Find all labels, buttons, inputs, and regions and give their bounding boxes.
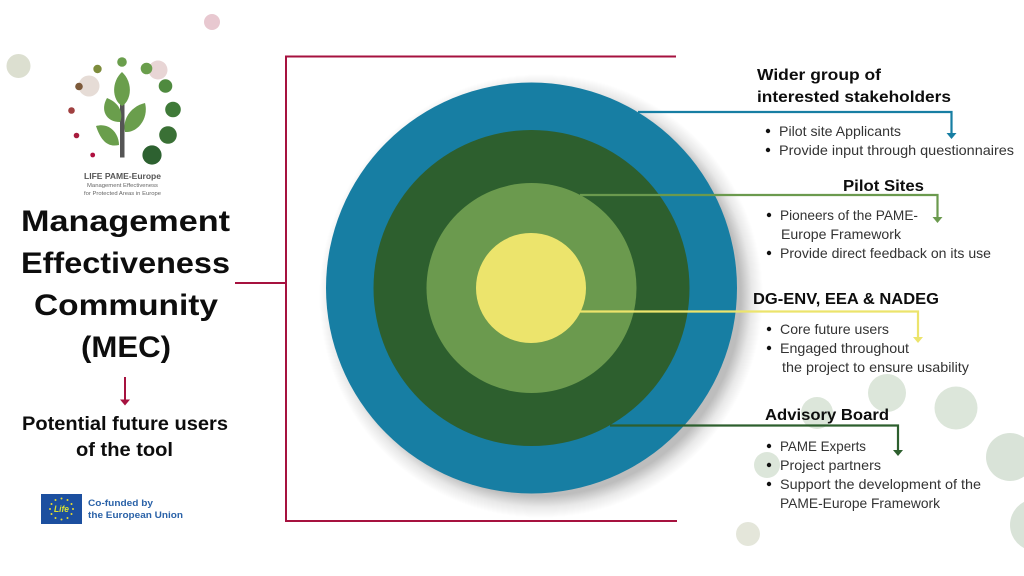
circle: DG-ENV, EEA & NADEG — [476, 233, 586, 343]
bullets: the project to ensure usability — [782, 359, 969, 375]
connector: pilot sites — [580, 195, 942, 223]
title: Management Effectiveness Community (MEC): Community — [34, 289, 219, 322]
arrow: title to subtitle — [120, 377, 130, 406]
heading: Wider group of — [757, 67, 882, 84]
concentric circle diagram — [319, 74, 763, 518]
bullets — [767, 438, 981, 511]
bullets: Support the development of the — [780, 476, 981, 492]
circle: wider group of stakeholders — [326, 82, 737, 494]
bullets: Pioneers of the PAME- — [780, 207, 918, 223]
heading: DG-ENV, EEA & NADEG — [753, 291, 939, 308]
circle: pilot sites — [426, 183, 636, 393]
connector: wider group — [638, 112, 956, 139]
bullets — [767, 207, 991, 261]
bullets: Core future users — [780, 321, 889, 337]
co-funded text: Co-funded by — [88, 498, 154, 509]
text block: DG-ENV, EEA & NADEG — [753, 291, 969, 375]
text block: pilot sites — [767, 178, 991, 261]
title: Management Effectiveness Community (MEC): Effectiveness — [21, 247, 230, 280]
logo dots — [68, 57, 181, 165]
connector: DG-ENV — [580, 312, 923, 343]
connector: advisory board — [610, 426, 903, 456]
heading: interested stakeholders — [757, 89, 951, 106]
subtitle: Potential future users of the tool: Potential future users — [22, 414, 228, 435]
bullets: Provide direct feedback on its use — [780, 245, 991, 261]
logo text — [84, 172, 162, 197]
bullets: PAME Experts — [780, 438, 866, 454]
logo text: Management Effectiveness — [87, 183, 158, 189]
text block: wider group of interested stakeholders — [757, 67, 1014, 158]
bracket — [235, 56, 677, 521]
bullets: Europe Framework — [781, 226, 902, 242]
heading: Advisory Board — [765, 407, 889, 424]
bullets: Pilot site Applicants — [779, 123, 901, 139]
circle: advisory board — [374, 130, 690, 446]
bullets: PAME-Europe Framework — [780, 495, 941, 511]
title: Management Effectiveness Community (MEC): Management — [21, 205, 230, 238]
co-funded text — [88, 498, 183, 521]
EU co-funding logo — [41, 494, 183, 524]
bullets — [766, 123, 1014, 158]
bullets: Project partners — [780, 457, 881, 473]
bullets — [767, 321, 969, 375]
title: Management Effectiveness Community (MEC) — [21, 205, 230, 364]
title: Management Effectiveness Community (MEC): (MEC) — [81, 331, 171, 364]
logo text: for Protected Areas in Europe — [84, 191, 161, 197]
subtitle: Potential future users of the tool: of the tool — [76, 440, 173, 461]
subtitle: Potential future users of the tool — [22, 414, 228, 461]
bullets: Provide input through questionnaires — [779, 142, 1014, 158]
icon: EU LIFE flag — [41, 494, 82, 524]
logo tree — [96, 72, 146, 158]
heading: Pilot Sites — [843, 178, 924, 195]
co-funded text: the European Union — [88, 510, 183, 521]
icon: EU LIFE flag: Life — [54, 504, 69, 514]
heading — [757, 67, 951, 106]
bullets: Engaged throughout — [780, 340, 909, 356]
logo text: LIFE PAME-Europe — [84, 172, 162, 181]
text block: advisory board — [765, 407, 981, 511]
logo: LIFE PAME-Europe — [68, 57, 181, 197]
